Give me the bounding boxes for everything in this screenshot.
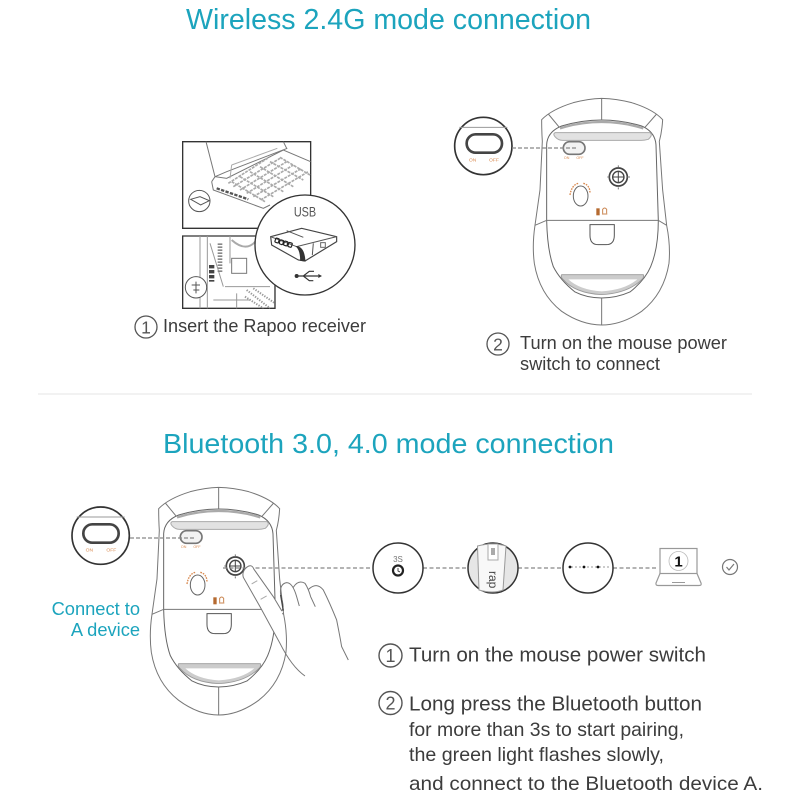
sensor	[570, 183, 590, 206]
mouse body outline	[150, 487, 286, 715]
step circle: flashing light	[563, 543, 613, 593]
step 1 caption: insert receiver: Insert the Rapoo receiver	[163, 316, 366, 336]
power switch: OFF	[576, 156, 584, 160]
power switch	[563, 142, 585, 160]
instruction 2: long press bluetooth button: and connect to the Bluetooth device A.	[409, 773, 763, 795]
title: bluetooth mode: Bluetooth 3.0, 4.0 mode connection	[163, 428, 614, 459]
mouse body outline	[533, 98, 669, 325]
icon: check mark	[722, 560, 738, 574]
inset: power switch zoom, bluetooth section: ON	[86, 547, 93, 553]
illustration: USB receiver insertion	[183, 142, 355, 308]
inset: power switch zoom, wireless section: OFF	[489, 157, 499, 163]
inset: power switch zoom, bluetooth section	[72, 507, 129, 564]
instruction 2: long press bluetooth button	[379, 692, 763, 795]
title: wireless mode: Wireless 2.4G mode connection	[186, 4, 591, 36]
inset: power switch zoom, wireless section	[455, 117, 512, 175]
instruction 1: turn on switch: 1	[385, 646, 396, 666]
power switch: ON	[564, 156, 570, 160]
power switch: ON	[181, 545, 187, 549]
inset: power switch zoom, wireless section: ON	[469, 157, 477, 163]
instruction 2: long press bluetooth button: for more than 3s to start pairing,	[409, 719, 684, 741]
step circle: green light on mouse	[468, 543, 518, 593]
step 1 caption: insert receiver: 1	[141, 318, 151, 338]
label: connect to A device: A device	[71, 619, 140, 640]
icon: battery indicators	[213, 597, 224, 604]
dashed connector: inset to switch	[512, 147, 577, 149]
inset: power switch zoom, bluetooth section: OFF	[106, 547, 116, 553]
circle: USB receiver close-up: USB	[294, 204, 316, 220]
dashed connector: inset to switch, bluetooth section	[130, 537, 194, 539]
step 2 caption: turn on switch	[487, 333, 727, 374]
step circle: 3s timer: 3S	[393, 555, 403, 564]
step circle: 3s timer	[373, 543, 423, 593]
icon: battery indicators	[596, 208, 607, 215]
step circle: green light on mouse: rap	[486, 571, 500, 589]
instruction 2: long press bluetooth button: Long press the Bluetooth button	[409, 694, 702, 716]
illustration: mouse underside with power switch	[533, 98, 669, 325]
icon: laptop device 1: 1	[674, 554, 683, 570]
step 2 caption: turn on switch: switch to connect	[520, 354, 660, 374]
illustration: mouse underside, bluetooth section	[150, 487, 286, 715]
label: connect to A device: Connect to	[52, 598, 140, 619]
bluetooth button	[224, 554, 244, 578]
power switch	[180, 531, 202, 549]
instruction 1: turn on switch: Turn on the mouse power switch	[409, 644, 706, 666]
power switch: OFF	[193, 545, 201, 549]
panel: laptop	[183, 142, 311, 228]
icon: pressing hand	[243, 566, 348, 676]
label: connect to A device	[52, 598, 140, 640]
sensor	[187, 572, 207, 595]
panel: desktop tower	[183, 236, 275, 308]
instruction 2: long press bluetooth button: the green light flashes slowly,	[409, 744, 664, 766]
bluetooth button	[607, 165, 630, 189]
step 2 caption: turn on switch: 2	[493, 334, 503, 354]
step 2 caption: turn on switch: Turn on the mouse power	[520, 333, 727, 353]
circle: USB receiver close-up	[255, 195, 355, 295]
instruction 2: long press bluetooth button: 2	[385, 694, 396, 714]
dashed connector: button to pairing steps	[223, 567, 657, 569]
icon: laptop device 1	[656, 548, 701, 586]
